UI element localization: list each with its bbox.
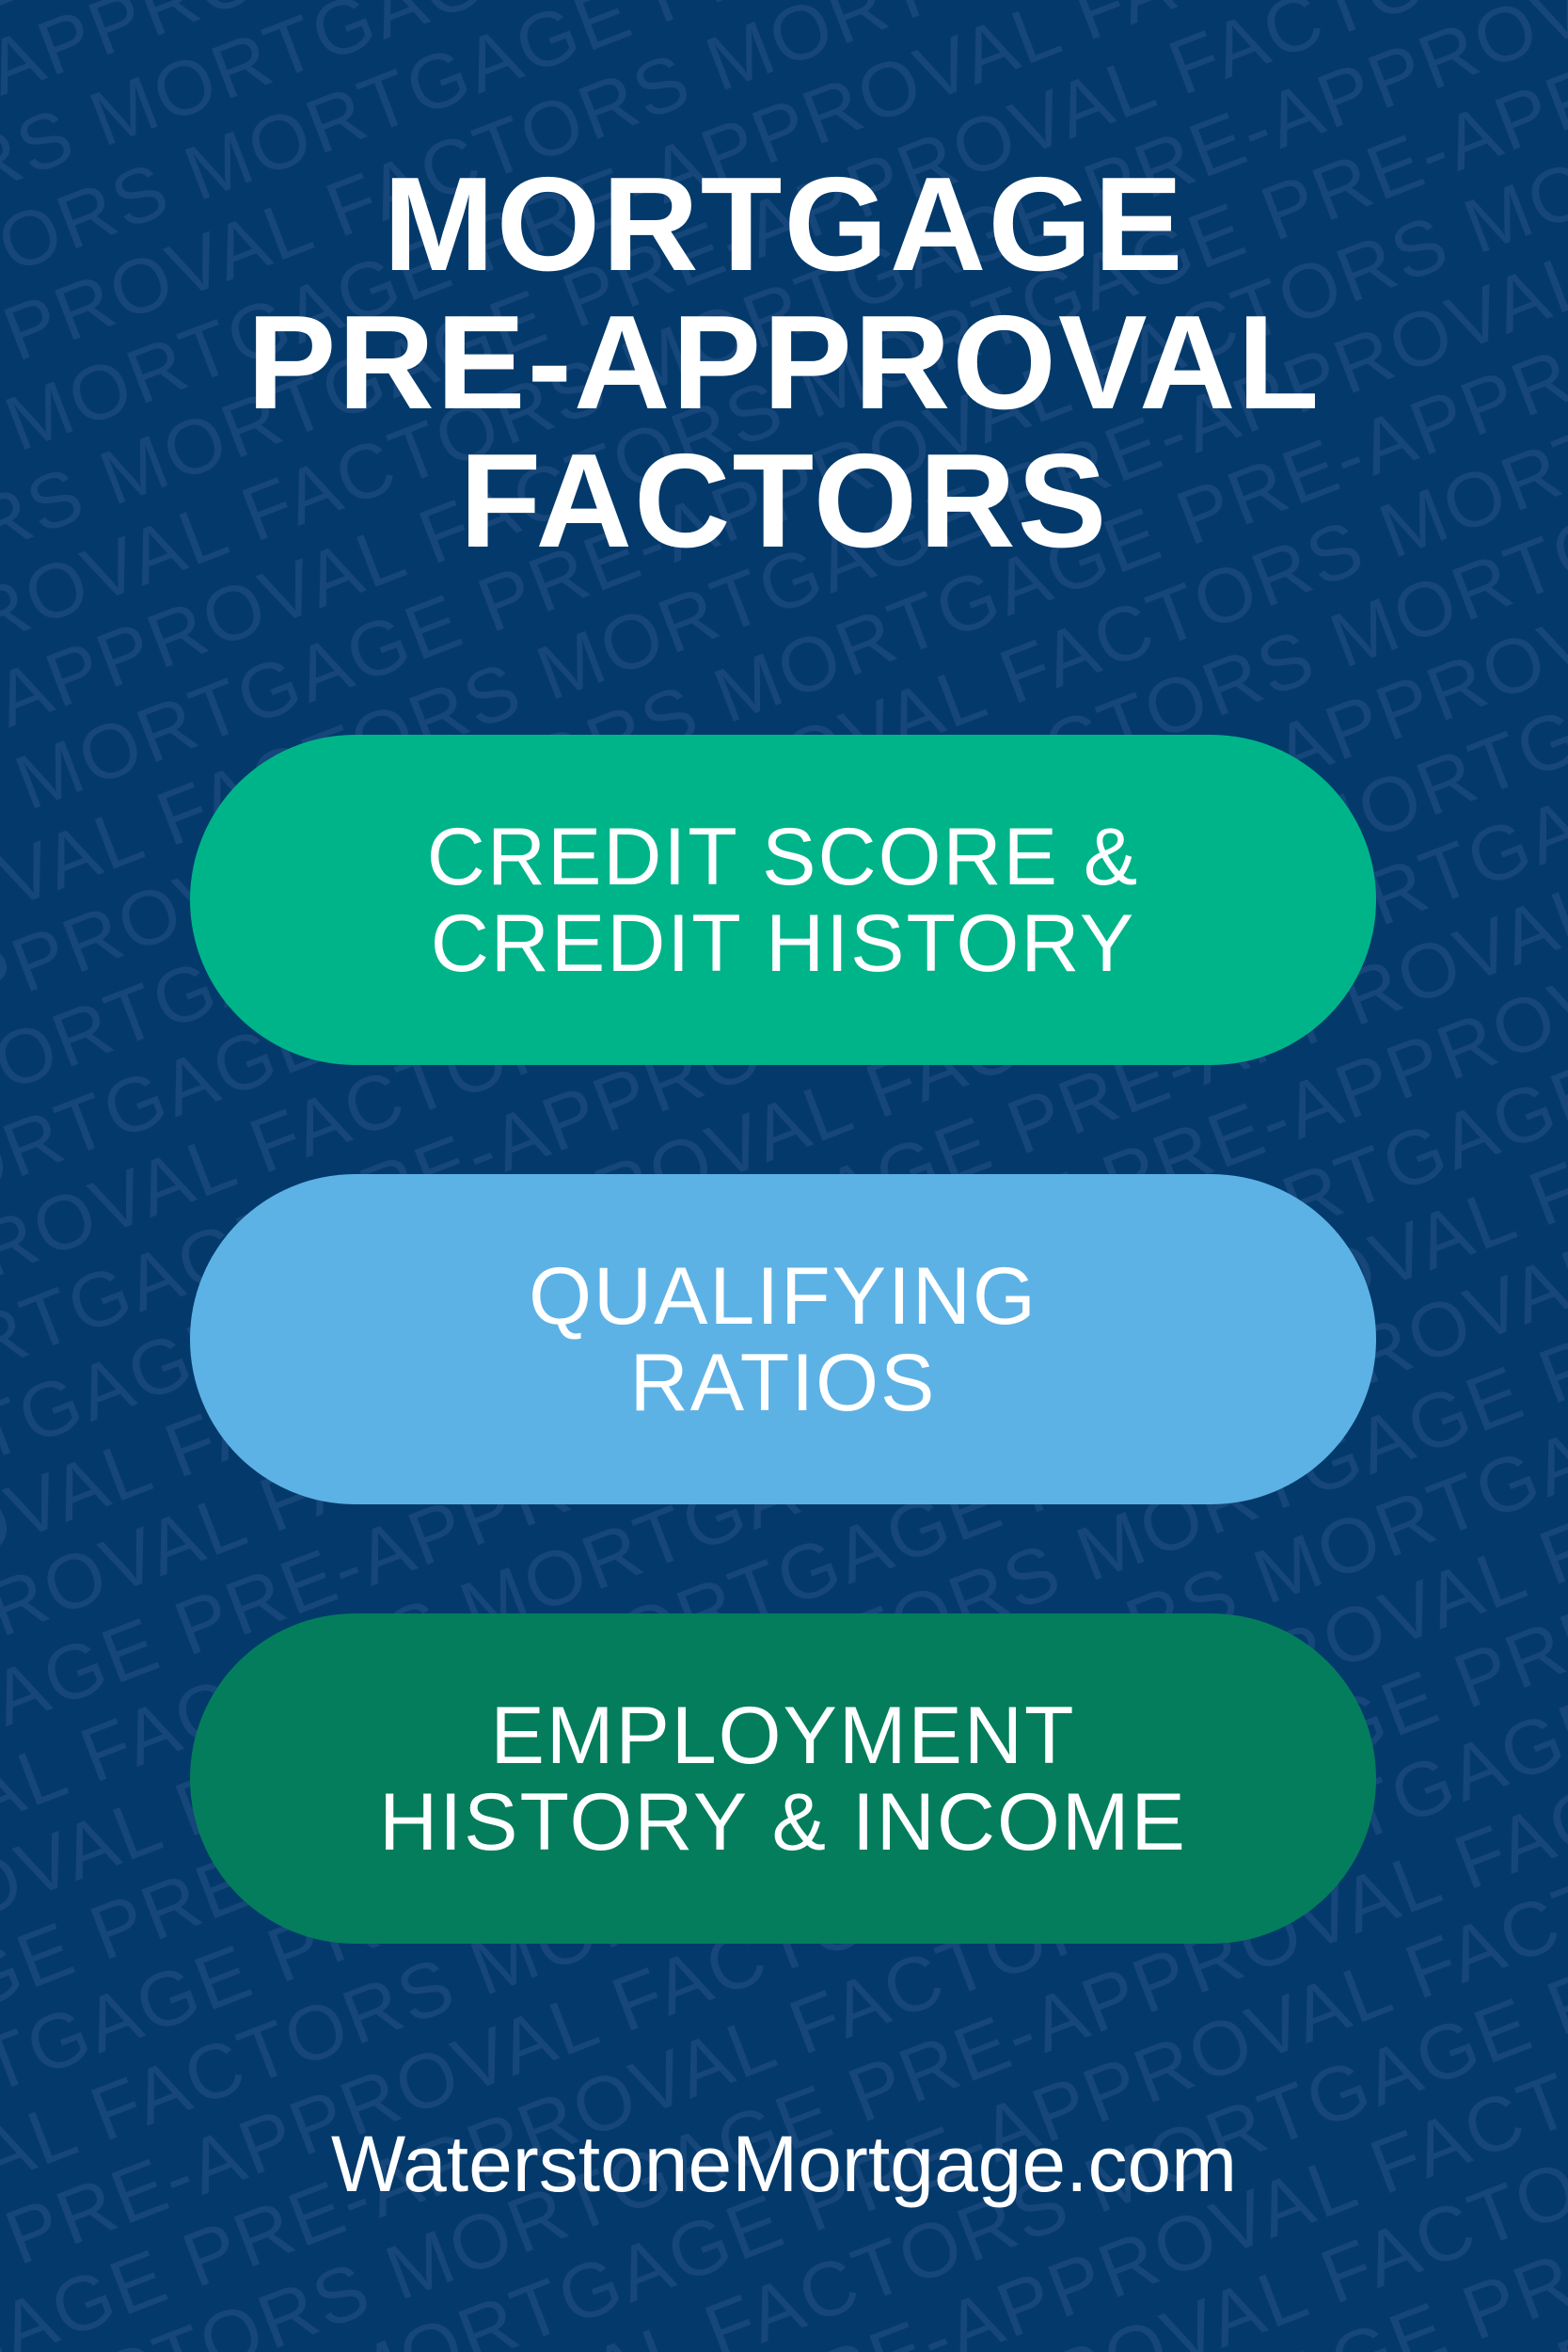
pill: qualifying ratios: RATIOS bbox=[630, 1338, 936, 1428]
pill: qualifying ratios bbox=[190, 1174, 1376, 1504]
pill: credit score: CREDIT SCORE & bbox=[427, 811, 1139, 901]
pill: employment bbox=[190, 1613, 1376, 1944]
pill: qualifying ratios: QUALIFYING bbox=[529, 1251, 1037, 1342]
website url: WaterstoneMortgage.com bbox=[331, 2120, 1237, 2208]
title: MORTGAGE bbox=[383, 150, 1185, 299]
pill: employment: HISTORY & INCOME bbox=[379, 1776, 1187, 1867]
title bbox=[247, 150, 1321, 576]
title: FACTORS bbox=[460, 426, 1108, 576]
pill: credit score bbox=[190, 735, 1376, 1065]
pill: credit score: CREDIT HISTORY bbox=[431, 898, 1135, 988]
title: PRE-APPROVAL bbox=[247, 288, 1321, 437]
pill: employment: EMPLOYMENT bbox=[490, 1690, 1076, 1780]
